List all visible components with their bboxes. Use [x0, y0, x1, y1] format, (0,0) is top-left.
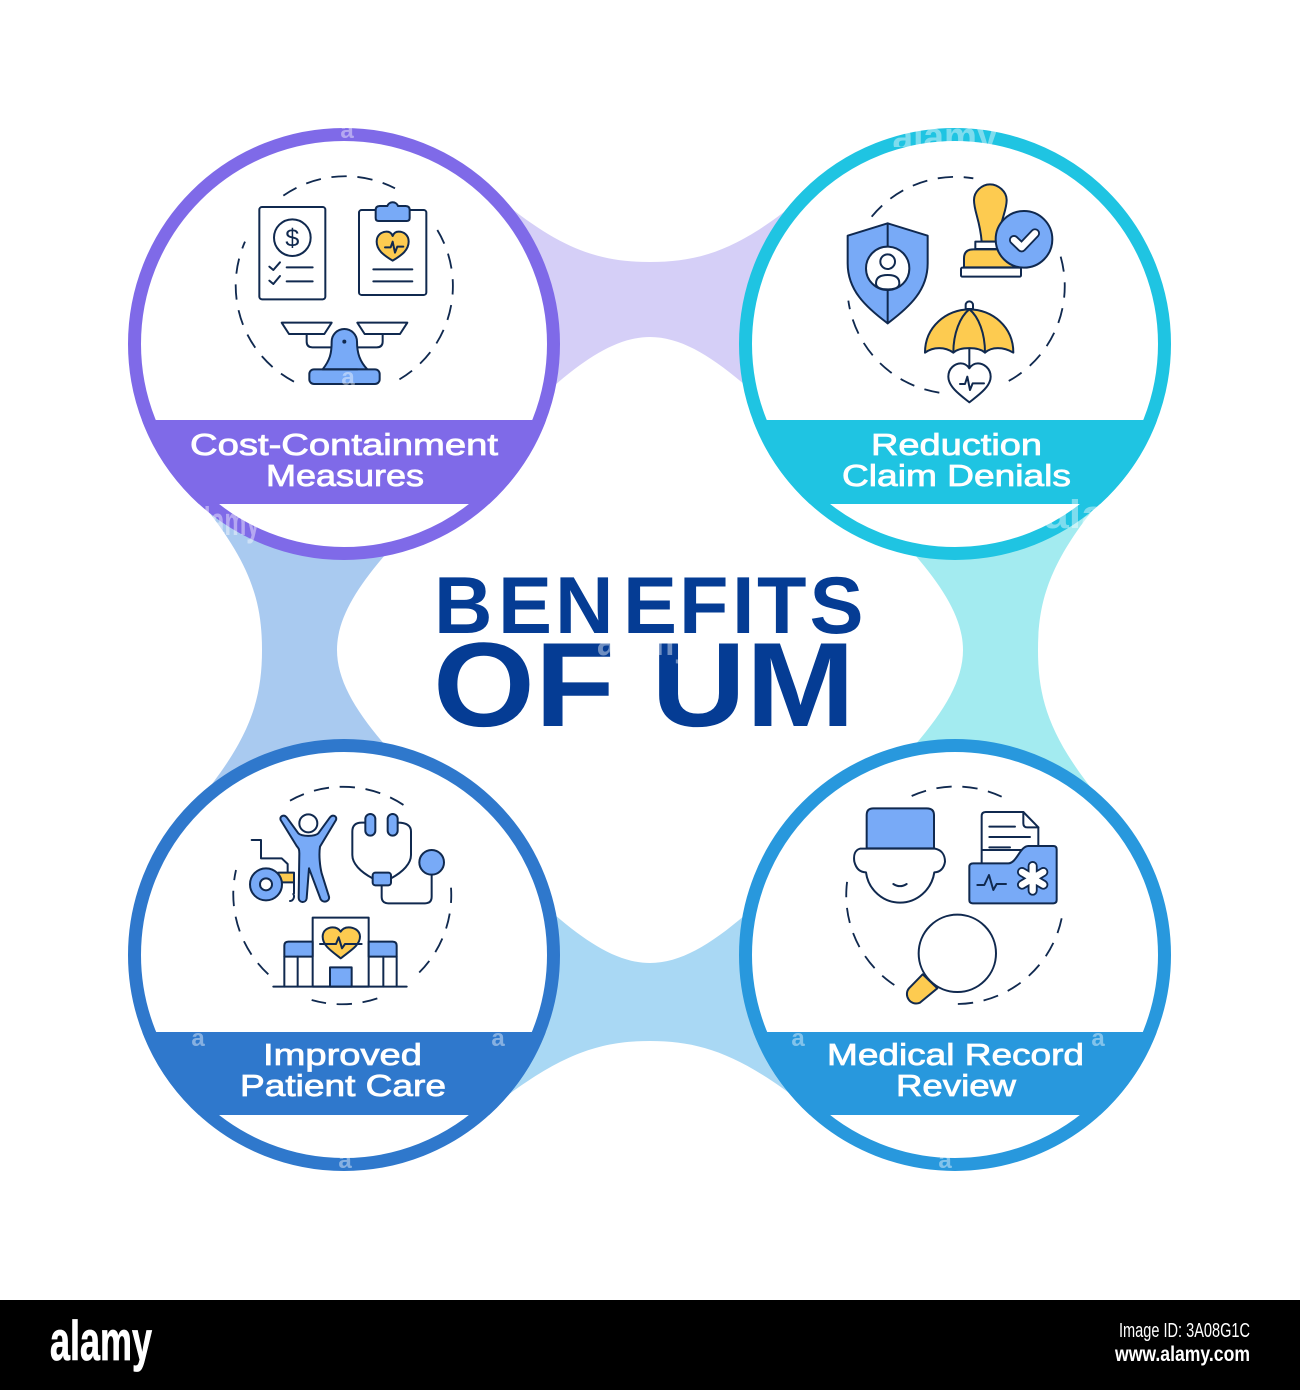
icon: stethoscope: [352, 814, 444, 903]
icon: invoice: $: [285, 225, 299, 253]
icon: medical record folder: [969, 812, 1057, 903]
panel: Medical Record Review: [739, 746, 1171, 1164]
icon: magnifying glass: [907, 915, 996, 1003]
text: a: [1091, 1025, 1105, 1052]
label text: Cost-Containment Measures: Cost-Containment: [190, 427, 498, 462]
title: OF UM: [433, 618, 855, 752]
label band: Improved Patient Care: [128, 1032, 560, 1115]
icon: raised arms person: [280, 814, 336, 902]
label text: Reduction Claim Denials: Reduction: [871, 427, 1042, 462]
connector: top lavender: [495, 195, 805, 385]
icon: wheelchair: [250, 840, 294, 901]
text: alamy: [190, 500, 260, 544]
footer bar: [0, 1300, 1300, 1390]
icon: approval stamp: [961, 184, 1052, 277]
label band: Medical Record Review: [739, 1032, 1171, 1115]
footer image id: Image ID: 3A08G1C: [1119, 1320, 1250, 1342]
text: a: [791, 1025, 805, 1052]
text: a: [938, 1147, 952, 1174]
panel: Improved Patient Care: [128, 746, 560, 1164]
text: alamy: [597, 620, 694, 664]
panel: Cost-Containment Measures: [128, 134, 560, 554]
icon group: patient, stethoscope and hospital: [233, 787, 451, 1004]
icon: hospital: [273, 918, 407, 987]
label text: Medical Record Review: Medical Record: [827, 1037, 1084, 1072]
text: a: [341, 364, 355, 391]
label text: Medical Record Review: [827, 1037, 1084, 1103]
text: a: [191, 1025, 205, 1052]
icon: balance scale: [282, 323, 407, 384]
label text: Cost-Containment Measures: [190, 427, 498, 493]
footer url: www.alamy.com: [1114, 1343, 1250, 1366]
text: a: [491, 1025, 505, 1052]
label text: Improved Patient Care: Patient Care: [240, 1068, 446, 1103]
panel: Reduction Claim Denials: [739, 134, 1171, 554]
icon group: invoice, clipboard and scale: [236, 176, 453, 384]
text: alamy: [892, 115, 998, 159]
title: [433, 561, 864, 752]
text: a: [340, 117, 354, 144]
label band: Cost-Containment Measures: [128, 420, 560, 504]
icon: invoice: [259, 207, 325, 299]
icon: umbrella over heart: [925, 301, 1013, 402]
label text: Cost-Containment Measures: Measures: [266, 458, 424, 493]
connector: right aqua: [915, 495, 1105, 805]
connector: bottom sky: [495, 915, 805, 1105]
icon: medical clipboard: [359, 202, 426, 295]
title: BENEFITS: [434, 561, 864, 651]
connector: left blue: [195, 495, 385, 805]
label band: Reduction Claim Denials: [739, 420, 1171, 504]
label text: Improved Patient Care: Improved: [263, 1037, 422, 1072]
text: ala: [1044, 493, 1107, 537]
label text: Reduction Claim Denials: [842, 427, 1071, 493]
label text: Medical Record Review: Review: [896, 1068, 1017, 1103]
label text: Improved Patient Care: [240, 1037, 446, 1103]
icon: shield with person: [848, 223, 928, 323]
icon: surgeon head: [854, 808, 945, 903]
footer logo: alamy: [50, 1309, 152, 1372]
icon group: surgeon, records and magnifier: [846, 786, 1062, 1004]
icon group: shield, stamp and umbrella: [848, 177, 1065, 402]
text: a: [338, 1147, 352, 1174]
label text: Reduction Claim Denials: Claim Denials: [842, 458, 1071, 493]
